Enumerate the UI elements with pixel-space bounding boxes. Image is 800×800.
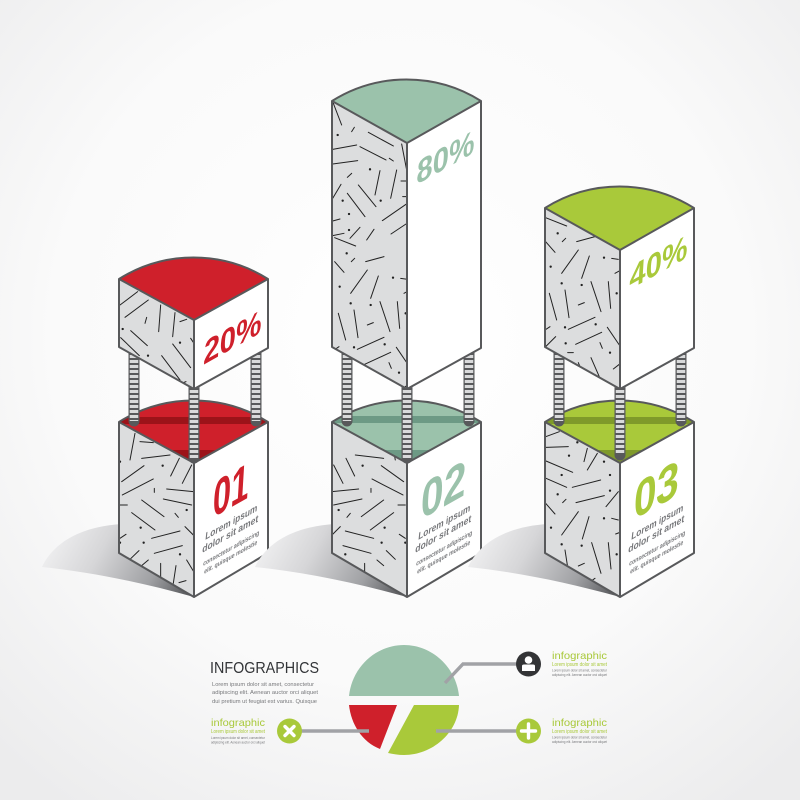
value 80%: 80% [416, 122, 476, 192]
legend: cross item: Lorem ipsum dolor sit amet [211, 729, 266, 735]
top block [332, 80, 481, 398]
value 20%: 20% [203, 302, 263, 372]
label text: Lorem ipsum [631, 503, 684, 543]
icon: plus [516, 718, 541, 744]
poles [134, 345, 256, 458]
number 01: 01 [211, 450, 251, 529]
label text [415, 503, 473, 576]
intro text block: dui pretium ut feugiat est varius. Quisque [212, 699, 317, 705]
icon: cross [277, 718, 302, 744]
legend: plus item: Lorem ipsum dolor sit amet [552, 729, 608, 735]
column 1: 20% red [42, 258, 268, 597]
legend: person item: infographic [552, 650, 607, 662]
shadow [42, 524, 194, 597]
legend: cross item: Lorem ipsum dolor sit amet, consectetur [211, 736, 266, 740]
shadow [468, 524, 620, 597]
shadow [255, 524, 407, 597]
value 40%: 40% [629, 227, 689, 297]
poles [559, 345, 681, 455]
intro text block [212, 682, 319, 705]
label text: dolor sit amet [202, 513, 259, 556]
label text: Lorem ipsum [418, 503, 471, 543]
column 3: 40% green [468, 187, 694, 597]
label text: elit. quisque molestie [630, 538, 684, 576]
connector: teal slice to person icon [445, 664, 520, 683]
label text: elit. quisque molestie [417, 538, 471, 576]
label text [202, 503, 260, 576]
pie slice: green [388, 705, 459, 755]
connector: red slice to cross icon [298, 729, 369, 733]
legend: person item: adipiscing elit. Aenean auctor orci aliquet [552, 673, 607, 677]
label text: dolor sit amet [628, 513, 685, 556]
label text [628, 503, 686, 576]
label text: dolor sit amet [415, 513, 472, 556]
poles [347, 345, 469, 458]
legend: plus item: adipiscing elit. Aenean auctor orci aliquet [552, 740, 607, 744]
number 03: 03 [632, 447, 681, 531]
intro text block: adipiscing elit. Aenean auctor orci aliquet [212, 690, 319, 696]
icon: person [516, 652, 541, 676]
legend: plus item [552, 717, 608, 744]
top block [545, 187, 694, 389]
legend: cross item [211, 717, 266, 744]
pie chart [349, 645, 459, 755]
legend: cross item: adipiscing elit. Aenean auctor orci aliquet [211, 740, 265, 744]
legend: plus item: infographic [552, 717, 607, 729]
label text: elit. quisque molestie [204, 538, 258, 576]
top block [119, 258, 268, 389]
label text: consectetur adipiscing [203, 528, 260, 568]
legend: person item [552, 650, 608, 677]
legend: person item: Lorem ipsum dolor sit amet, consectetur [552, 668, 608, 672]
column 2: 80% teal [255, 80, 481, 597]
label text: Lorem ipsum [205, 503, 258, 543]
bottom block [119, 401, 268, 597]
bottom block [332, 401, 481, 597]
connector: green slice to plus icon [436, 729, 520, 733]
intro text block: Lorem ipsum dolor sit amet, consectetur [212, 682, 314, 688]
legend: cross item: infographic [211, 717, 265, 729]
pie slice: teal [349, 645, 459, 696]
heading: INFOGRAPHICS: INFOGRAPHICS [210, 660, 319, 677]
label text: consectetur adipiscing [416, 528, 473, 568]
bottom block [545, 401, 694, 597]
legend: person item: Lorem ipsum dolor sit amet [552, 662, 608, 668]
legend: plus item: Lorem ipsum dolor sit amet, consectetur [552, 736, 608, 740]
label text: consectetur adipiscing [629, 528, 686, 568]
number 02: 02 [419, 447, 468, 531]
pie slice: red [349, 705, 397, 749]
